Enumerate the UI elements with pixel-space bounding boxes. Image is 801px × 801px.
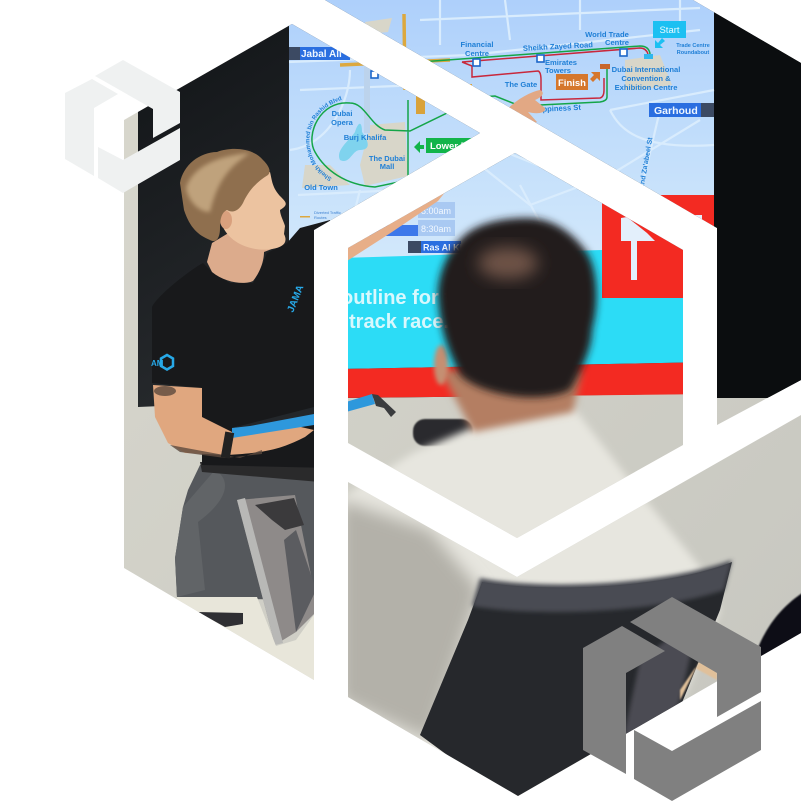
chest logo: JAMA	[286, 284, 306, 314]
hair	[180, 149, 270, 241]
tablet far end	[346, 394, 396, 417]
map labels: Old Town	[304, 183, 338, 192]
display black bezel	[138, 0, 801, 407]
neck	[440, 370, 582, 432]
time chips: 8:30am	[421, 224, 451, 234]
Lower Dubai sign: Lower Dubai	[430, 141, 487, 152]
skin patch near lower logo	[680, 660, 717, 700]
Ras Al Khor sign: Ras Al Khor	[423, 242, 475, 252]
green route	[312, 46, 650, 187]
map labels: The Gate	[505, 80, 537, 89]
pants	[175, 465, 320, 600]
pointing hand	[509, 90, 546, 122]
map labels	[304, 32, 710, 219]
map labels: Financial	[461, 40, 493, 49]
red route	[462, 48, 648, 100]
map labels: Centre	[605, 38, 629, 47]
burj lake	[339, 124, 368, 161]
map labels: Happiness St	[533, 103, 582, 114]
shirt	[330, 407, 720, 800]
soundbar on table	[413, 419, 473, 446]
red road sign panel	[602, 195, 714, 298]
chair rim	[472, 560, 732, 612]
tablet	[232, 407, 314, 438]
sleeve logo: AM	[151, 359, 164, 368]
map labels: Sheikh Zayed Road	[523, 40, 593, 53]
legend dash	[300, 216, 310, 218]
map labels: Trade Centre	[676, 43, 710, 49]
map labels: Burj Khalifa	[344, 133, 387, 142]
tattoos	[154, 386, 262, 458]
wristband	[221, 432, 234, 459]
Finish chip	[556, 72, 600, 90]
hair highlights	[186, 153, 250, 212]
logo: light hexagon top left	[65, 60, 180, 193]
map labels: Sheikh Mohammed bin Rashid Blvd	[306, 96, 342, 181]
roads	[288, 0, 714, 218]
Garhoud sign: Garhoud	[654, 105, 698, 117]
chair	[420, 562, 732, 801]
presenter	[151, 90, 545, 690]
map labels: Centre	[465, 49, 489, 58]
map labels: 2nd Za'abeel St	[639, 136, 655, 188]
face	[222, 172, 286, 250]
Ras Al Khor sign	[408, 241, 461, 253]
map labels: Dubai	[332, 109, 352, 118]
map labels: Exhibition Centre	[615, 83, 677, 92]
ear	[434, 345, 448, 385]
Finish chip: Finish	[558, 78, 586, 89]
Garhoud sign	[649, 103, 714, 117]
district patches	[302, 18, 672, 188]
raised forearm	[347, 191, 446, 261]
background chair at right	[750, 588, 801, 672]
map labels: Routes	[314, 215, 327, 220]
finish marker	[600, 64, 610, 69]
upper arm	[153, 385, 314, 455]
table	[170, 597, 316, 690]
orange diverted route	[340, 14, 450, 90]
station markers	[371, 49, 627, 78]
ear	[220, 211, 232, 229]
Jabal Ali sign: Jabal Ali	[301, 49, 342, 60]
slide cyan panel	[348, 248, 683, 369]
slide cyan panel: track race.	[349, 311, 449, 333]
start marker	[644, 54, 653, 59]
map labels: Emirates	[545, 58, 577, 67]
Start chip	[653, 21, 686, 48]
slide cyan panel: outline for the	[341, 287, 474, 309]
slide red band	[348, 362, 683, 398]
map screen	[288, 0, 714, 258]
torso tee	[152, 220, 330, 468]
logo: grey hexagon bottom right	[583, 597, 761, 801]
Jabal Ali sign	[289, 47, 350, 60]
burj tower	[364, 65, 370, 133]
sleeve logo	[151, 355, 173, 370]
time chips: 8:00am	[421, 206, 451, 216]
shirt shadow	[340, 500, 480, 740]
table object	[198, 612, 243, 627]
map labels: Opera	[331, 118, 354, 127]
laptop	[237, 495, 316, 645]
head	[438, 218, 596, 397]
neck	[207, 234, 273, 283]
map labels: Dubai International	[612, 65, 680, 74]
map labels: Convention &	[621, 74, 671, 83]
chair lower panel	[610, 615, 700, 800]
Start chip: Start	[659, 25, 680, 36]
seated man	[330, 218, 732, 801]
map labels: Roundabout	[677, 50, 709, 56]
map labels: Diverted Traffic	[314, 210, 341, 215]
time chips	[369, 202, 455, 236]
thin hair patch	[478, 247, 538, 279]
map labels: The Dubai	[369, 154, 405, 163]
pants shading	[175, 470, 225, 597]
map labels: World Trade	[585, 30, 629, 39]
Lower Dubai sign	[414, 138, 472, 153]
map labels: Towers	[545, 66, 571, 75]
map labels: Mall	[380, 162, 394, 171]
right bezel	[714, 0, 801, 398]
belt	[200, 462, 320, 482]
